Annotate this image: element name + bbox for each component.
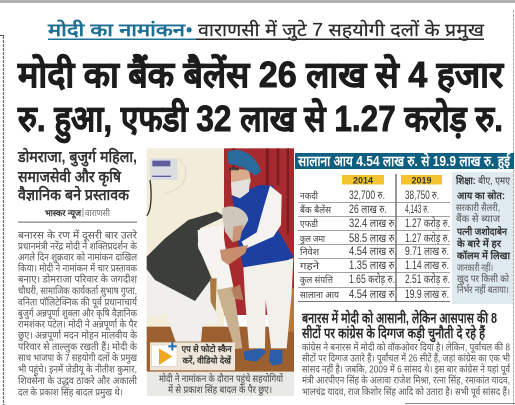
figure: Badal	[228, 150, 293, 366]
icon: play with plus	[152, 342, 177, 366]
byline: वाराणसी	[85, 207, 111, 218]
year chips	[342, 175, 442, 186]
left column body text: चौधरी, सामाजिक कार्यकर्ता सुभाष गुप्ता,	[18, 285, 137, 297]
assets table: बैंक बैलेंस	[300, 204, 332, 216]
left column body text: बनारस के रण में दूसरी बार उतरे	[18, 230, 138, 242]
photo caption	[147, 372, 294, 396]
byline: भास्कर न्यूज	[45, 208, 81, 219]
assets table: 38,750 रु.	[405, 190, 439, 202]
left column body text: बनाए। डोमराजा परिवार के जगदीश	[18, 274, 137, 286]
assets table: कुल संपत्ति	[300, 274, 333, 286]
sidebar: education and income source: आय का स्रोत:	[457, 189, 505, 202]
assets table: निवेश	[300, 246, 320, 258]
kicker headline	[47, 19, 484, 41]
left column heading: वैज्ञानिक बने प्रस्तावक	[17, 185, 130, 204]
kicker headline: मोदी का नामांकन	[47, 19, 186, 40]
figure: Modi	[147, 206, 248, 349]
assets table: 19.9 लाख रु.	[405, 289, 449, 301]
sidebar: education and income source: शिक्षा: बीए, एमए	[455, 174, 510, 187]
assets table: कुल जमा	[300, 234, 325, 245]
assets table: 32,700 रु.	[349, 190, 385, 202]
photo caption: मोदी ने नामांकन के दौरान पहुंचे सहयोगियों	[159, 373, 283, 386]
left column body text: रामशंकर पटेल। मोदी ने अन्नपूर्णा के पैर	[18, 318, 138, 330]
app callout	[150, 342, 235, 370]
kicker headline: •	[186, 20, 192, 40]
byline	[18, 207, 137, 223]
left column body text	[18, 230, 138, 398]
sidebar: education and income source: के बारे में हर	[456, 237, 502, 250]
sidebar: education and income source: कॉलम में लिखा	[456, 249, 510, 262]
assets table: 4,143 रु.	[405, 204, 429, 216]
sidebar: education and income source: पत्नी जशोदाबेन	[456, 225, 507, 238]
left column body text: छुए। अन्नपूर्णा मदन मोहन मालवीय के	[18, 330, 137, 342]
app callout: करें, वीडियो देखें	[182, 355, 232, 366]
app callout: एप से फोटो स्कैन	[181, 343, 233, 354]
assets table: 1.14 लाख रु.	[405, 260, 449, 272]
assets table: 32.4 लाख रु.	[349, 218, 397, 230]
left column body text: बुजुर्ग अन्नपूर्णा शुक्ला और कृषि वैज्ञानिक	[18, 308, 137, 320]
left column heading	[17, 147, 137, 204]
left column body text: अगले दिन शुक्रवार को नामांकन दाखिल	[18, 252, 137, 264]
year chips: 2014	[353, 176, 373, 186]
sidebar: education and income source: सरकारी सैलरी,	[456, 202, 500, 214]
left column body text: परिवार से ताल्लुक रखती हैं। मोदी के	[18, 341, 137, 353]
assets table: 1.27 करोड़ रु.	[405, 231, 450, 245]
assets table: सालाना आय	[300, 290, 339, 301]
assets table: 1.65 करोड़ रु.	[349, 272, 395, 286]
left column body text: वनिता पॉलिटेक्निक की पूर्व प्रधानाचार्य	[18, 296, 138, 308]
assets table: नकदी	[300, 190, 318, 202]
left column body text: किया। मोदी ने नामांकन में चार प्रस्तावक	[18, 262, 137, 274]
icon: wall device	[147, 158, 186, 216]
left column body text: साथ भाजपा के 7 सहयोगी दलों के प्रमुख	[18, 352, 138, 364]
bottom story body text	[302, 342, 511, 398]
assets table: एफडी	[300, 218, 318, 230]
assets table: 26 लाख रु.	[349, 204, 387, 216]
left column body text: भी पहुंचे। इनमें जेडीयू के नीतीश कुमार,	[18, 364, 137, 376]
left column heading: डोमराजा, बुजुर्ग महिला,	[17, 147, 137, 167]
bottom story heading	[301, 309, 497, 343]
photo: Modi touching Badal's feet	[147, 148, 294, 372]
assets table: 4.54 लाख रु.	[349, 246, 397, 258]
sidebar: education and income source: जानकारी नहीं।	[457, 262, 493, 274]
assets table: 1.27 करोड़ रु.	[405, 216, 450, 230]
assets table: गहने	[300, 260, 320, 272]
sidebar: education and income source	[452, 172, 513, 304]
left column body text: शिवसेना के उद्धव ठाकरे और अकाली	[18, 375, 137, 387]
year chips: 2019	[411, 176, 432, 186]
assets table: 2.51 करोड़ रु.	[405, 272, 450, 286]
sidebar: education and income source: बैंक से ब्याज	[456, 213, 501, 225]
left column heading: समाजसेवी और कृषि	[17, 167, 122, 187]
main headline: मोदी का बैंक बैलेंस 26 लाख से 4 हजार	[17, 54, 504, 95]
assets table	[298, 174, 450, 302]
main headline	[17, 54, 504, 143]
assets table: 1.35 लाख रु.	[349, 260, 397, 272]
photo caption: में से प्रकाश सिंह बादल के पैर छुए।	[168, 384, 272, 396]
assets table: 4.54 लाख रु.	[349, 289, 397, 301]
assets table: 9.71 लाख रु.	[405, 246, 449, 258]
left column body text: दल के प्रकाश सिंह बादल प्रमुख थे।	[18, 386, 123, 398]
assets table: 58.5 लाख रु.	[349, 233, 397, 245]
kicker headline: वाराणसी में जुटे 7 सहयोगी दलों के प्रमुख	[198, 19, 484, 41]
left column body text: प्रधानमंत्री नरेंद्र मोदी ने शक्तिप्रदर्शन के	[18, 240, 137, 252]
